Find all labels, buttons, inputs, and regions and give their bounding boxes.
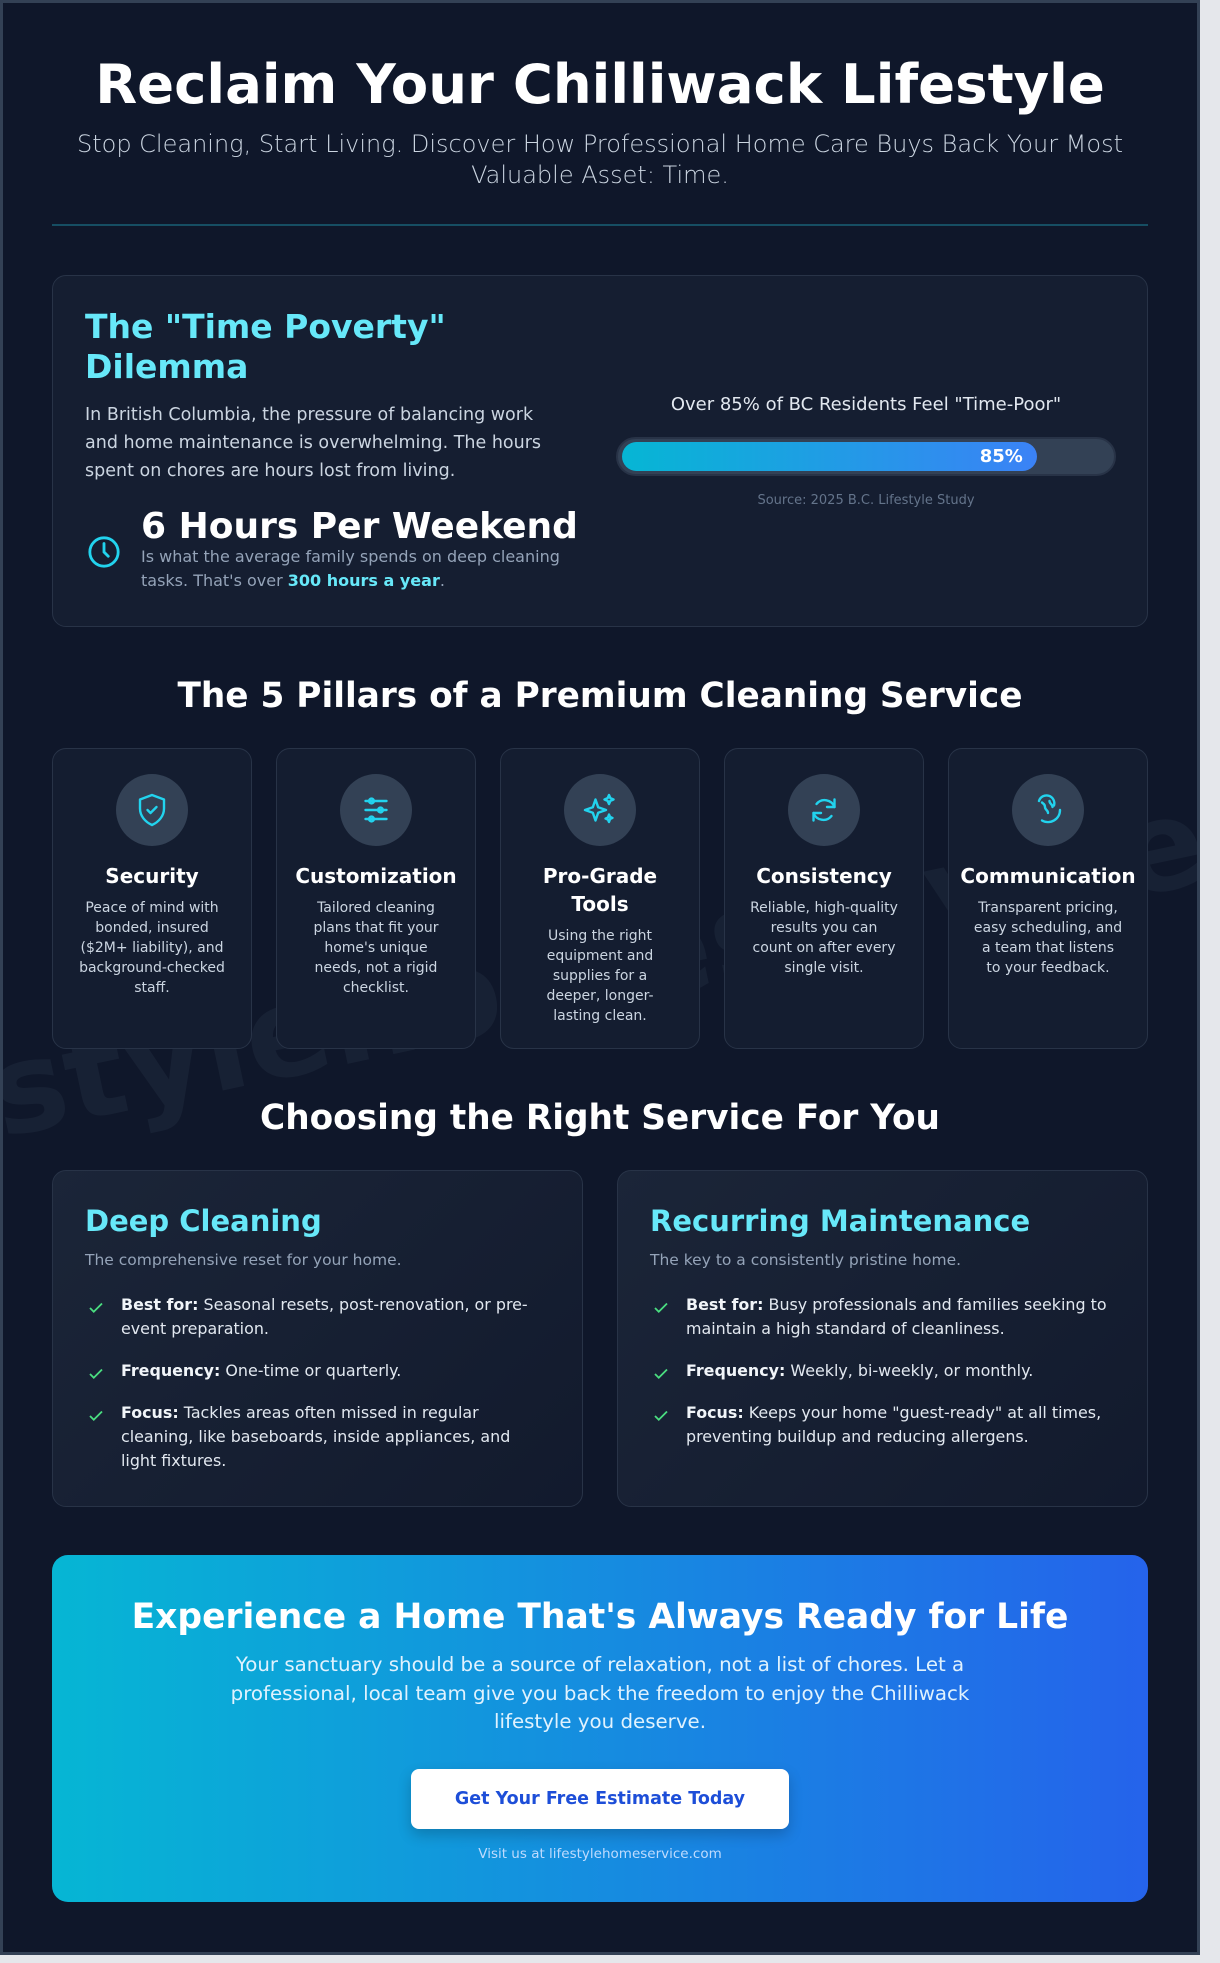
panel: recurring maintenance: Frequency: Weekly, bi-weekly, or monthly. xyxy=(686,1361,1033,1380)
panel: recurring maintenance: The key to a consistently pristine home. xyxy=(650,1251,961,1269)
callout: CTA xyxy=(52,1555,1148,1902)
subtitle: Stop Cleaning, Start Living. Discover How Professional Home Care Buys Back Your Most Valuable Asset: Time. xyxy=(77,130,1123,189)
CTA text: Your sanctuary should be a source of relaxation, not a list of chores. Let a professional, local team give you back the freedom to enjoy the Chilliwack lifestyle you deserve. xyxy=(231,1653,969,1733)
icon: sliders xyxy=(340,774,412,846)
panel: pro-grade tools: Using the right equipment and supplies for a deeper, longer-lasting clean. xyxy=(546,928,654,1024)
icon: sparkles xyxy=(564,774,636,846)
panel: deep cleaning: Frequency: One-time or quarterly. xyxy=(121,1361,401,1380)
panel: communication xyxy=(948,748,1148,1049)
panel: customization: Customization xyxy=(295,864,457,888)
panel: consistency: Consistency xyxy=(756,864,892,888)
panel: consistency: Reliable, high-quality results you can count on after every single visit. xyxy=(750,900,898,976)
icon: refresh xyxy=(788,774,860,846)
stat: 6 hours: 6 Hours Per Weekend xyxy=(141,506,578,547)
panel: customization xyxy=(276,748,476,1049)
button: Get Your Free Estimate Today xyxy=(455,1788,745,1808)
panel: deep cleaning xyxy=(52,1170,583,1507)
panel: pro-grade tools xyxy=(500,748,700,1049)
panel: pro-grade tools: Pro-Grade xyxy=(543,864,657,888)
panel: deep cleaning: Focus: Tackles areas often missed in regular cleaning, like baseboards, inside appliances, and light fixtures. xyxy=(121,1403,510,1470)
panel: security: Security xyxy=(105,864,199,888)
CTA heading: Experience a Home That's Always Ready for Life xyxy=(132,1597,1068,1637)
panel: communication: Transparent pricing, easy scheduling, and a team that listens to your feedback. xyxy=(974,900,1122,976)
bar chart: 85%: 85% xyxy=(980,446,1023,467)
panel: deep cleaning: The comprehensive reset for your home. xyxy=(85,1251,402,1269)
heading: The "Time Poverty" Dilemma xyxy=(85,307,446,386)
panel: customization: Tailored cleaning plans that fit your home's unique needs, not a rigid checklist. xyxy=(313,900,439,996)
stat: 6 hours: Is what the average family spends on deep cleaning tasks. That's over 300 hours a year. xyxy=(141,547,560,590)
icon: clock xyxy=(88,536,120,568)
bar chart: 85%: Source: 2025 B.C. Lifestyle Study xyxy=(757,493,975,508)
bar chart: 85%: Over 85% of BC Residents Feel "Time-Poor" xyxy=(671,394,1061,415)
panel: deep cleaning: Deep Cleaning xyxy=(85,1204,322,1238)
panel: communication: Communication xyxy=(960,864,1136,888)
panel: recurring maintenance: Best for: Busy professionals and families seeking to maintain a high standard of cleanliness. xyxy=(686,1295,1107,1338)
panel: consistency xyxy=(724,748,924,1049)
title: Reclaim Your Chilliwack Lifestyle xyxy=(95,52,1105,116)
panel: security: Peace of mind with bonded, insured ($2M+ liability), and background-checked staff. xyxy=(79,900,225,996)
heading: pillars: The 5 Pillars of a Premium Cleaning Service xyxy=(177,676,1023,716)
icon: shield xyxy=(116,774,188,846)
panel: security xyxy=(52,748,252,1049)
panel: deep cleaning: Best for: Seasonal resets, post-renovation, or pre-event preparation. xyxy=(121,1295,528,1338)
icon: globe chat xyxy=(1012,774,1084,846)
panel: recurring maintenance xyxy=(617,1170,1148,1507)
panel: recurring maintenance: Focus: Keeps your home "guest-ready" at all times, preventing buildup and reducing allergens. xyxy=(686,1403,1101,1446)
stat: 6 hours xyxy=(141,506,578,590)
footer link: Visit us at lifestylehomeservice.com xyxy=(478,1846,722,1862)
panel: pro-grade tools: Tools xyxy=(571,892,629,916)
button xyxy=(411,1768,789,1828)
heading: choosing: Choosing the Right Service For You xyxy=(260,1098,940,1138)
paragraph: In British Columbia, the pressure of balancing work and home maintenance is overwhelming. The hours spent on chores are hours lost from living. xyxy=(85,405,541,481)
panel: time poverty xyxy=(52,275,1148,627)
bar chart: 85% xyxy=(616,394,1116,508)
panel: recurring maintenance: Recurring Maintenance xyxy=(650,1204,1030,1238)
